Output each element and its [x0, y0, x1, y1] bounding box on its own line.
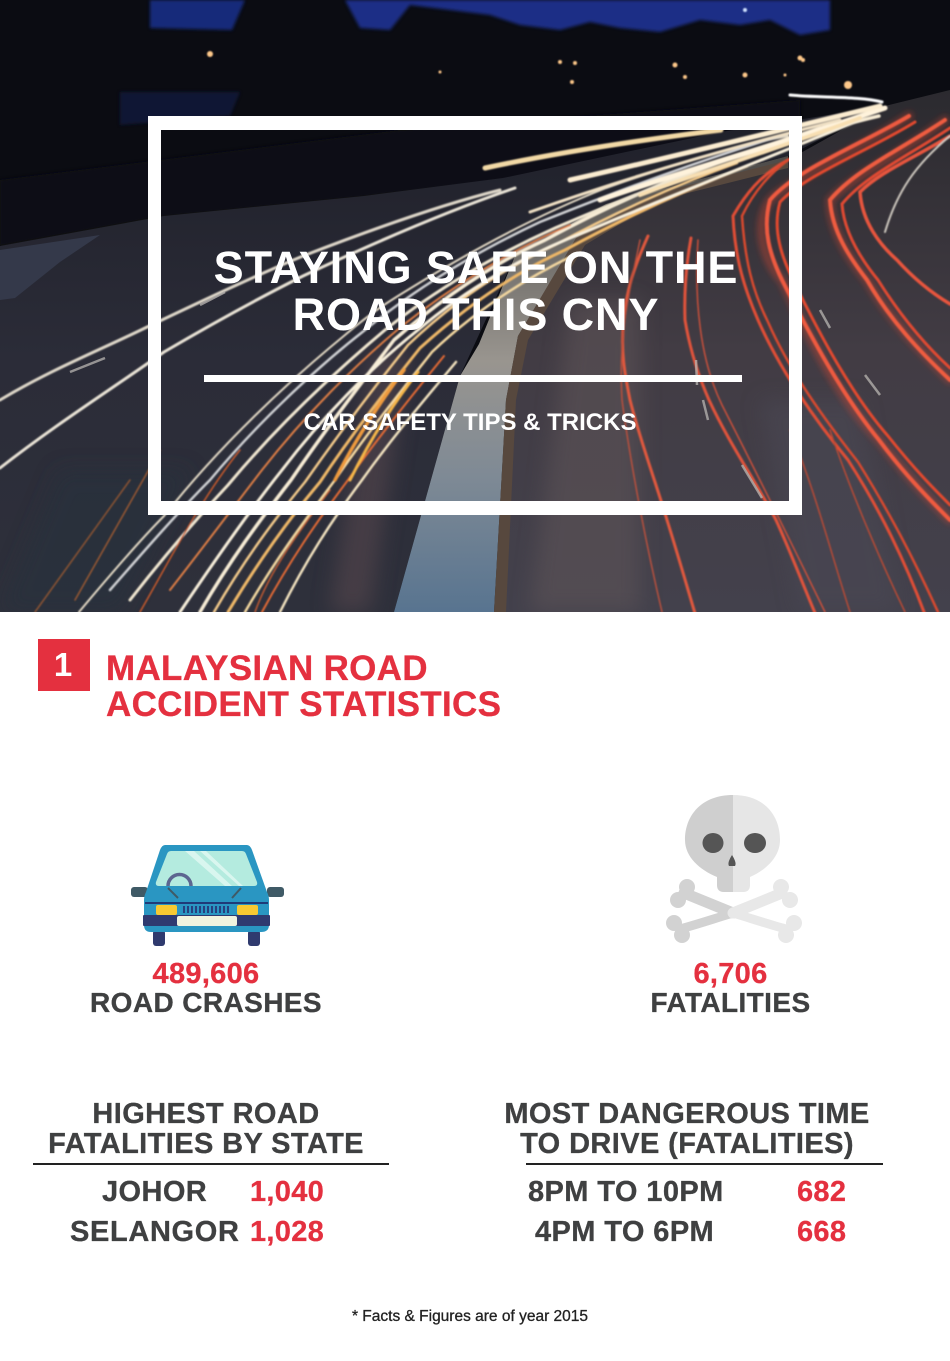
table rows: states: JOHOR — [102, 1176, 207, 1208]
table rows: states: SELANGOR — [70, 1216, 240, 1248]
lane markings — [70, 292, 880, 498]
stat: fatalities: FATALITIES — [650, 987, 811, 1018]
subtitle: CAR SAFETY TIPS & TRICKS — [304, 409, 636, 436]
table heading: highest road fatalities by state: HIGHEST ROAD — [92, 1098, 320, 1130]
section number badge — [38, 639, 90, 691]
title frame — [148, 116, 802, 515]
table rule — [526, 1163, 883, 1165]
table heading: highest road fatalities by state: FATALITIES BY STATE — [48, 1128, 364, 1160]
title divider — [204, 375, 742, 382]
section heading: MALAYSIAN ROAD — [106, 649, 428, 688]
title — [214, 242, 738, 340]
left carriageway — [0, 106, 885, 612]
table rows: times — [528, 1176, 846, 1248]
table heading: most dangerous time: TO DRIVE (FATALITIES) — [520, 1128, 854, 1160]
hero photo: road light trails at night — [0, 0, 950, 612]
table rows: times: 4PM TO 6PM — [535, 1216, 714, 1248]
stat: fatalities — [650, 958, 811, 1018]
stat: fatalities: 6,706 — [693, 958, 768, 990]
right bones — [733, 879, 802, 943]
table rule — [33, 1163, 389, 1165]
verge — [0, 100, 800, 246]
sky — [120, 0, 830, 125]
stat: road crashes: ROAD CRASHES — [90, 987, 322, 1018]
kerb median — [394, 156, 788, 612]
table rows: times: 682 — [797, 1176, 846, 1208]
section heading: ACCIDENT STATISTICS — [106, 685, 501, 724]
table rows: times: 8PM TO 10PM — [528, 1176, 724, 1208]
table rows: states — [70, 1176, 324, 1248]
table heading: most dangerous time: MOST DANGEROUS TIME — [504, 1098, 870, 1130]
table rows: times: 668 — [797, 1216, 846, 1248]
stat: road crashes: 489,606 — [153, 958, 259, 990]
title: ROAD THIS CNY — [293, 289, 659, 340]
kerb side wall — [494, 160, 788, 612]
table rows: states: 1,028 — [250, 1216, 324, 1248]
icon: skull and crossbones — [666, 795, 802, 943]
table rows: states: 1,040 — [250, 1176, 324, 1208]
road surface patches — [0, 300, 900, 612]
section number badge: 1 — [54, 646, 72, 683]
icon: car — [131, 845, 284, 946]
left bones — [666, 879, 733, 943]
table heading: highest road fatalities by state — [48, 1098, 364, 1160]
street lights — [207, 8, 852, 89]
footnote: * Facts & Figures are of year 2015 — [352, 1308, 588, 1325]
right carriageway — [494, 90, 950, 612]
table heading: most dangerous time — [504, 1098, 870, 1160]
section heading — [106, 649, 501, 724]
title: STAYING SAFE ON THE — [214, 242, 738, 293]
stat: road crashes — [90, 958, 322, 1018]
red tail-light trails — [621, 116, 950, 620]
white and amber light trails — [0, 95, 885, 612]
